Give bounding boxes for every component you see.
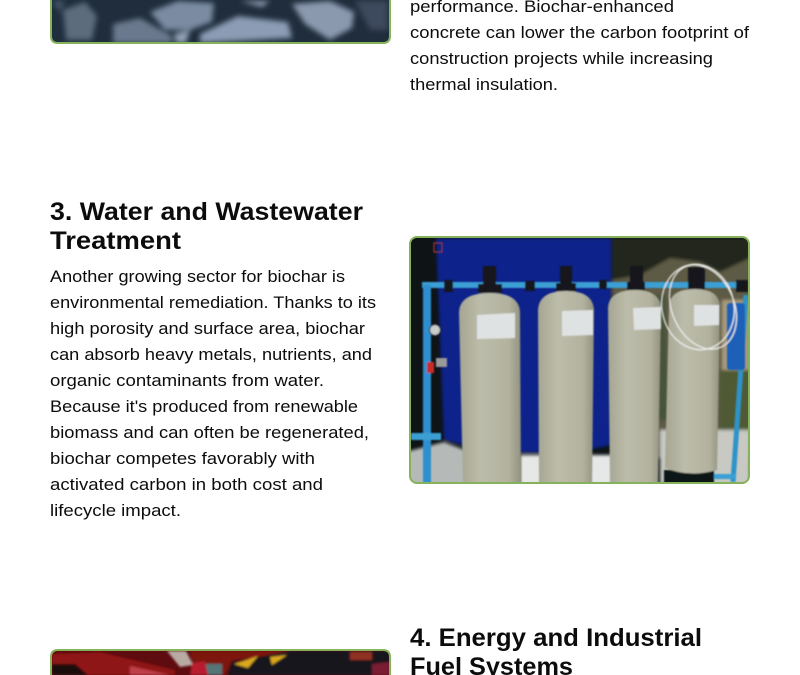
tank 1 bbox=[459, 293, 521, 485]
tank labels bbox=[477, 305, 719, 339]
text: concrete paragraph bbox=[410, 0, 749, 94]
text: water treatment paragraph: Another growing sector for biochar is bbox=[50, 267, 345, 286]
text: water treatment paragraph bbox=[50, 267, 376, 520]
image: water filtration tanks bbox=[405, 237, 752, 488]
text: water treatment paragraph: lifecycle impact. bbox=[50, 501, 181, 520]
text: water treatment paragraph: environmental remediation. Thanks to its bbox=[50, 293, 376, 312]
text: water treatment paragraph: biochar competes favorably with bbox=[50, 449, 315, 468]
image: biochar pile bbox=[51, 0, 390, 43]
text: water treatment paragraph: high porosity and surface area, biochar bbox=[50, 319, 365, 338]
tank 3 bbox=[608, 290, 661, 485]
image: industrial fuel machinery bbox=[51, 650, 390, 675]
text: water treatment paragraph: biomass and can often be regenerated, bbox=[50, 423, 369, 442]
text: concrete paragraph: construction projects while increasing bbox=[410, 49, 713, 68]
text: water treatment paragraph: can absorb heavy metals, nutrients, and bbox=[50, 345, 372, 364]
text: concrete paragraph: concrete can lower the carbon footprint of bbox=[410, 23, 749, 42]
heading: water and wastewater treatment: Treatment bbox=[50, 227, 182, 255]
text: concrete paragraph: thermal insulation. bbox=[410, 75, 558, 94]
tank valves bbox=[444, 266, 748, 293]
white coil bbox=[660, 262, 738, 352]
text: water treatment paragraph: Because it's produced from renewable bbox=[50, 397, 358, 416]
blue housing bbox=[727, 303, 745, 370]
pipework bbox=[411, 282, 746, 483]
text: water treatment paragraph: organic contaminants from water. bbox=[50, 371, 324, 390]
pressure gauge and valve bbox=[427, 243, 447, 373]
heading: water and wastewater treatment: 3. Water and Wastewater bbox=[50, 198, 363, 226]
heading: energy and industrial fuel systems bbox=[410, 624, 702, 675]
tank 2 bbox=[538, 291, 594, 485]
heading: energy and industrial fuel systems: 4. Energy and Industrial bbox=[410, 624, 702, 652]
text: water treatment paragraph: activated carbon in both cost and bbox=[50, 475, 323, 494]
heading: water and wastewater treatment bbox=[50, 198, 363, 255]
tank 4 bbox=[664, 470, 714, 485]
